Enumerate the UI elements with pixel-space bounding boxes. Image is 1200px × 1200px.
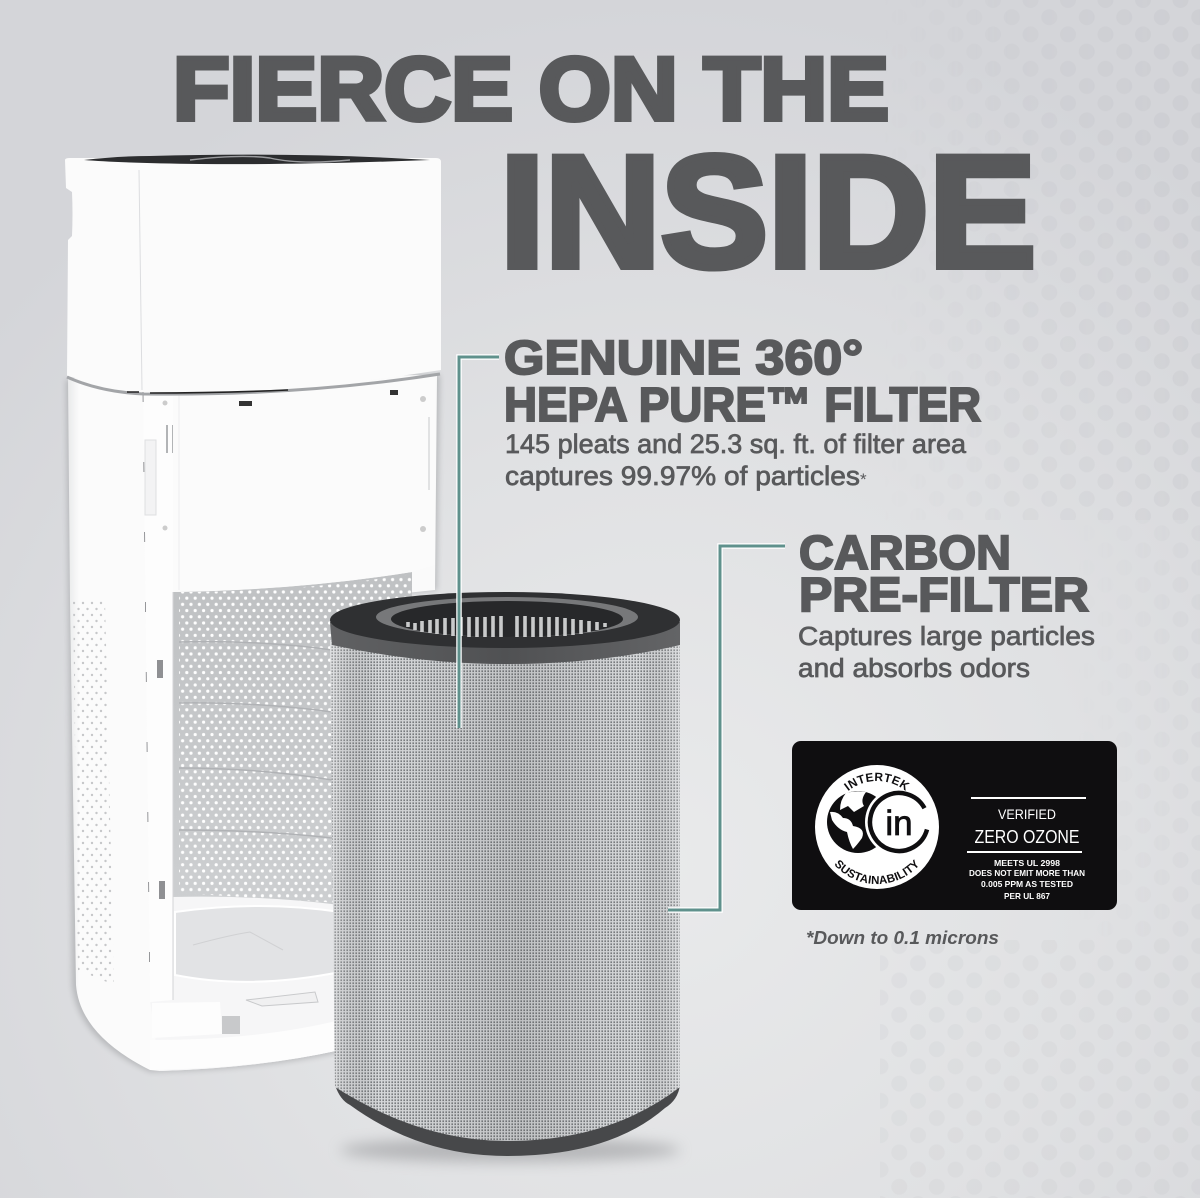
filter floor shadow (340, 1138, 680, 1162)
callout line: HEPA filter (459, 357, 499, 728)
globe continents (830, 791, 866, 849)
seal text bottom: SUSTAINABILITY (835, 859, 918, 884)
filter base ring (335, 1085, 680, 1156)
description: pleats: 145 pleats and 25.3 sq. ft. of filter area (505, 429, 966, 459)
feature: carbon pre-filter (798, 527, 1095, 683)
callout line: carbon filter (668, 546, 785, 910)
meets UL: MEETS UL 2998 (994, 859, 1060, 868)
replacement filter (330, 592, 680, 1162)
purifier shadow (66, 375, 440, 1072)
purifier lower body (68, 375, 437, 1071)
perforated inner wall (172, 572, 412, 905)
filter top ring (330, 592, 680, 648)
title line: fierce on the: FIERCE ON THE (173, 38, 889, 138)
heading: genuine 360: GENUINE 360° (504, 332, 863, 385)
does not emit: DOES NOT EMIT MORE THAN (969, 869, 1085, 878)
top cover (65, 155, 441, 394)
filter mesh body (330, 640, 680, 1141)
dark top opening (84, 155, 430, 164)
callout line: carbon filter teal (668, 546, 785, 910)
filter top band (330, 622, 680, 664)
description: odors: and absorbs odors (798, 655, 1030, 683)
seal text top: INTERTEK (844, 772, 910, 791)
asterisk: * (860, 470, 867, 489)
per UL: PER UL 867 (1004, 892, 1050, 901)
globe (827, 791, 889, 853)
certification badge (792, 741, 1117, 910)
heading: hepa pure filter: HEPA PURE™ FILTER (504, 379, 981, 432)
filter opening (391, 601, 623, 637)
intertek seal (815, 765, 939, 889)
ppm: 0.005 PPM AS TESTED (981, 880, 1073, 889)
feature: genuine HEPA filter (504, 332, 981, 491)
in letters: in (885, 804, 913, 843)
description: large particles: Captures large particles (798, 623, 1095, 651)
filter inner rim (376, 597, 638, 637)
filter pleats (408, 616, 605, 637)
title (173, 38, 1036, 300)
callout line: HEPA filter teal (459, 357, 499, 728)
upper interior panel (162, 376, 435, 592)
left body perforations (73, 600, 114, 985)
description: captures: captures 99.97% of particles (505, 461, 860, 491)
verified zero ozone text (967, 797, 1086, 901)
zero ozone: ZERO OZONE (974, 827, 1080, 847)
front pillar (143, 392, 173, 1002)
base tray (150, 897, 340, 1071)
chrome band (67, 374, 440, 394)
footnote: *Down to 0.1 microns (806, 928, 999, 948)
heading: pre-filter: PRE-FILTER (799, 569, 1089, 622)
in ring (863, 786, 935, 858)
air purifier with cover lifted (65, 155, 441, 1072)
heading: carbon: CARBON (799, 527, 1011, 580)
verified: VERIFIED (998, 806, 1056, 822)
in ring gap (865, 788, 933, 856)
title line: inside: INSIDE (500, 122, 1036, 300)
